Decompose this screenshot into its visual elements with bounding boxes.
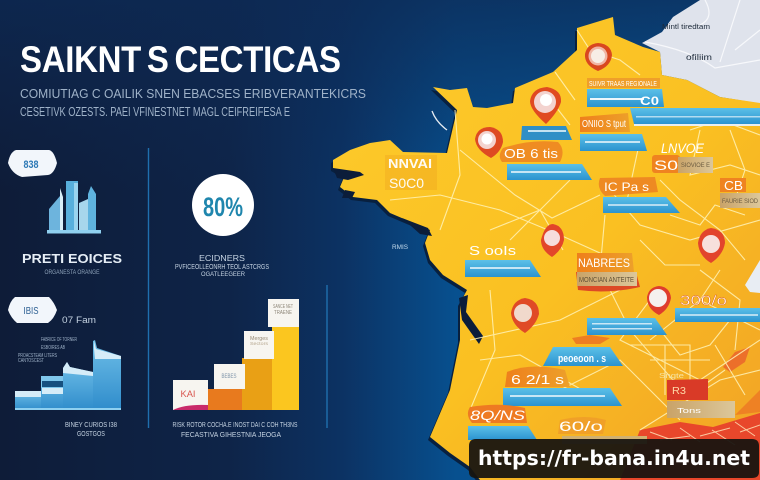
pin <box>511 298 539 333</box>
country labels: Mintl tiredtam <box>662 22 710 31</box>
title: SAIKNT S CECTICAS <box>20 39 341 80</box>
caption: RISK ROTOR COCHA.E INOST DAI C COH TH3NS <box>172 422 298 429</box>
south labels: 60/o <box>559 418 603 434</box>
caption: BINEY CURIOS I38 <box>65 422 117 429</box>
map pins <box>475 43 725 333</box>
north labels: C0 <box>640 94 659 108</box>
label: PVFICEOLLEONRH TEOL ASTCRGS <box>175 264 269 271</box>
map of France <box>331 0 760 480</box>
step labels: Merges <box>250 336 269 342</box>
east labels: CB <box>724 178 743 193</box>
south labels: peoeoon . s <box>558 353 606 365</box>
step labels: SANCE NET <box>273 304 293 310</box>
subtitle: CESETIVK OZESTS. PAEI VFINESTNET MAGL CEIFREIFESA E <box>20 105 290 119</box>
watermark: https://fr-bana.in4u.net <box>478 446 750 470</box>
Brittany label band <box>385 155 437 190</box>
centre labels: IC Pa s <box>604 180 649 194</box>
north labels <box>580 78 760 151</box>
east labels: FAURIE SIOD <box>722 199 759 205</box>
south region hatching <box>650 422 760 445</box>
south labels: 6 2/1 s <box>511 372 565 387</box>
south labels <box>468 335 735 444</box>
panel: orange step chart <box>172 299 299 439</box>
small sea label: RMIS <box>392 245 408 251</box>
step labels: Sectors <box>250 341 269 346</box>
land <box>333 17 760 480</box>
south labels: Sngte <box>659 373 684 380</box>
caption <box>65 422 117 438</box>
east labels <box>652 140 760 208</box>
south labels: Tons <box>677 408 702 415</box>
road network <box>390 30 760 430</box>
pin <box>585 43 612 71</box>
east labels: LNVOE <box>661 140 705 156</box>
region labels west <box>388 156 432 191</box>
neighbour border lines <box>645 0 760 68</box>
badge <box>8 297 57 323</box>
panel: top-middle stat <box>175 174 269 278</box>
country labels: ofiliim <box>686 52 712 62</box>
north labels: SUIVR TRAAS REGIONALE <box>589 79 657 88</box>
centre labels: OB 6 tis <box>504 146 559 161</box>
mid labels: S ooIs <box>469 243 517 258</box>
white coast accents <box>432 111 447 130</box>
pin <box>647 286 671 315</box>
steps <box>173 299 299 410</box>
annotations: FABRICE OF TORNER <box>41 337 77 343</box>
coast shadow <box>331 20 758 480</box>
caption: FECASTIVA GIHESTNIA JEOGA <box>181 430 281 439</box>
mid labels <box>465 243 760 335</box>
south labels: R3 <box>672 386 686 397</box>
subtitle <box>20 87 366 119</box>
panel divider lines <box>148 148 327 428</box>
region labels west: NNVAI <box>388 156 432 171</box>
grey patch <box>745 260 760 293</box>
caption: ORGANESTA ORANGE <box>44 269 100 276</box>
south labels: 8Q/NS <box>470 407 526 423</box>
centre labels <box>500 126 680 213</box>
subtitle: COMIUTIAG C OAILIK SNEN EBACSES ERIBVERANTEKICRS <box>20 87 366 101</box>
region labels west: S0C0 <box>389 175 424 191</box>
label: PRETI EOICES <box>22 252 122 266</box>
mid labels: NABREES <box>578 256 630 270</box>
annotations: ESBOIRES AB <box>41 345 65 351</box>
south red region <box>620 413 760 480</box>
east amber region <box>735 390 760 415</box>
east labels: SIOVIOE E <box>681 163 710 169</box>
circle stat: 80% <box>203 192 243 222</box>
watermark <box>469 439 759 478</box>
step labels: KAI <box>180 389 196 399</box>
label <box>175 254 269 278</box>
badge: IBIS <box>24 306 39 317</box>
small label: 07 Fam <box>62 315 96 325</box>
pin <box>541 224 564 257</box>
coast dark inlets <box>333 168 483 344</box>
annotations: PROACSTEAM LITERS <box>18 353 57 359</box>
label: OGATLEEGEER <box>201 271 245 278</box>
mid labels: 300/o <box>680 292 727 308</box>
annotations <box>18 337 77 364</box>
pin <box>530 87 561 124</box>
neighbouring land <box>642 0 760 103</box>
bars <box>15 340 121 410</box>
step labels <box>180 304 293 399</box>
badge: 838 <box>24 159 38 171</box>
caption: GOSTGOS <box>77 431 105 438</box>
north labels: ONIIO S tput <box>582 119 626 130</box>
step labels: TRAENE <box>274 310 293 316</box>
step labels: BEBES <box>222 374 236 380</box>
east orange region <box>723 347 750 372</box>
panel: top-left stat <box>8 150 122 276</box>
caption <box>172 422 298 439</box>
pin <box>698 228 725 263</box>
pin <box>475 127 503 158</box>
annotations: CANTOSCEST <box>18 358 44 364</box>
country labels <box>662 22 712 62</box>
icon: city towers <box>47 181 101 234</box>
map labels <box>465 78 760 444</box>
label: ECIDNERS <box>199 254 245 263</box>
east labels: S0 <box>654 157 678 173</box>
panel: blue bar chart <box>8 297 121 438</box>
mid labels: MONCIAN ANTEITE <box>579 277 634 284</box>
